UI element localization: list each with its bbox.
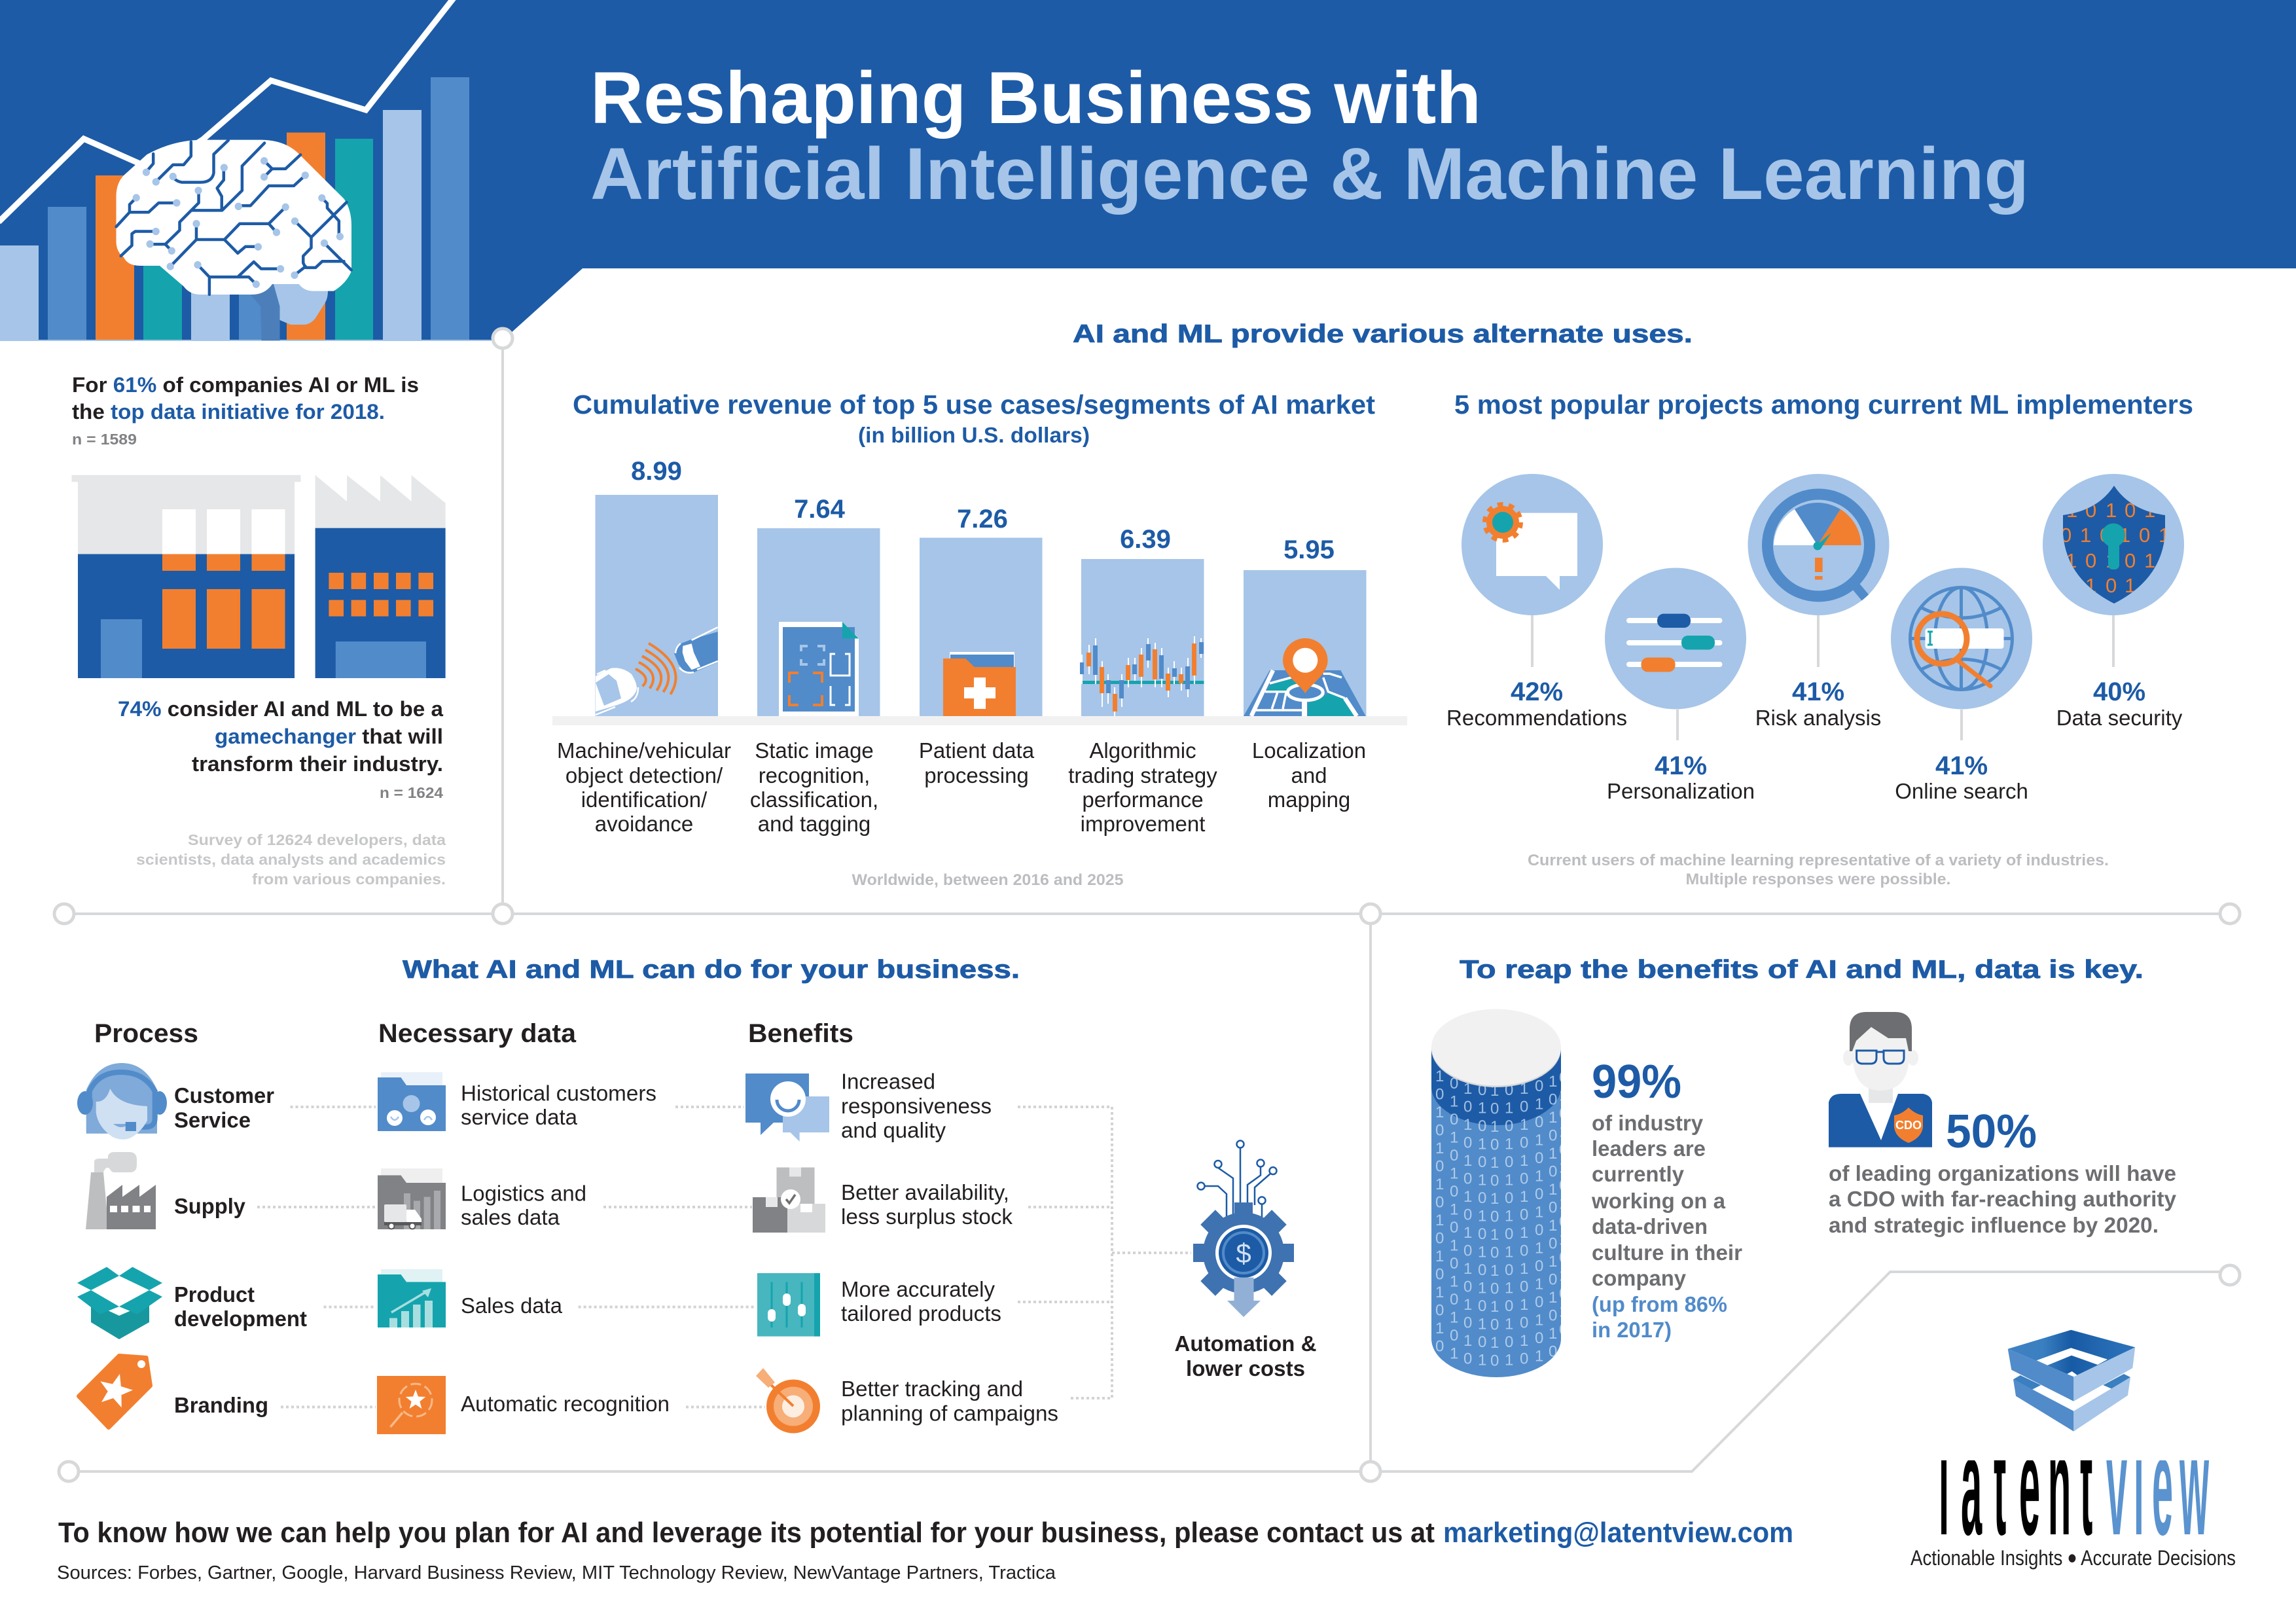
icon: binary data cylinder: 0101010101	[1435, 1157, 1568, 1190]
icon: logistics data folder	[378, 1168, 446, 1229]
text: 74% statistic: gamechanger that will	[215, 725, 443, 748]
panel footnote	[1528, 852, 2109, 888]
logo mark	[2008, 1330, 2135, 1432]
item: risk analysis: Risk analysis	[1755, 706, 1881, 730]
text: responsiveness: responsiveness	[841, 1094, 992, 1118]
text: campaigns	[841, 1377, 1058, 1426]
icon: binary data cylinder: 0101010101	[1435, 1338, 1568, 1369]
icon: customer service	[77, 1063, 167, 1140]
text: 99% statistic: company	[1592, 1266, 1687, 1290]
icon: circuit brain	[117, 140, 351, 340]
text: 99% statistic: working on a	[1591, 1189, 1726, 1213]
icon: binary data cylinder: 0101010101	[1435, 1301, 1568, 1334]
logo: LatentView	[1910, 1330, 2236, 1575]
chart labels: processing	[924, 763, 1029, 787]
icon: binary data cylinder: 1010101010	[1435, 1068, 1568, 1100]
chart labels: recognition,	[759, 763, 870, 787]
chart labels: object detection/	[565, 763, 723, 787]
text: 99% statistic: culture in their	[1592, 1240, 1742, 1265]
chart labels	[557, 738, 1366, 836]
title: Artificial Intelligence & Machine Learning	[590, 133, 2029, 215]
chart labels: trading strategy	[1068, 763, 1217, 787]
chart labels: Algorithmic	[1089, 738, 1196, 763]
icon: product box	[77, 1267, 162, 1339]
text: 50% statistic: of leading organizations will have	[1829, 1161, 2176, 1185]
logo tagline: Actionable Insights	[1910, 1546, 2087, 1570]
item: online search	[1891, 568, 2032, 803]
chart labels: avoidance	[595, 812, 693, 836]
text: logistics data: sales data	[461, 1205, 560, 1229]
text: availability: less surplus stock	[841, 1204, 1013, 1229]
icon: chief data officer: CDO	[1895, 1119, 1922, 1132]
chart labels: Static image	[755, 738, 874, 763]
text: 99% statistic: of industry	[1592, 1111, 1704, 1135]
column headings: Process	[94, 1019, 198, 1048]
panel footnote: Multiple responses were possible.	[1686, 871, 1950, 888]
text: sales data: Sales data	[461, 1293, 563, 1318]
text: automation and lower costs	[1174, 1331, 1317, 1380]
item: data security: 101010	[2066, 499, 2174, 522]
text: 61% statistic: the top data initiative for 2018.	[72, 400, 385, 424]
text: automation and lower costs: Automation &	[1174, 1331, 1317, 1356]
item: personalization	[1605, 568, 1755, 803]
text: availability	[841, 1180, 1013, 1229]
icon: binary data cylinder: 0101010101	[1435, 1194, 1568, 1225]
title	[590, 57, 2029, 215]
icon: vehicles with sensor waves	[596, 627, 718, 715]
text: 99% statistic: 99%	[1592, 1056, 1681, 1108]
icon: sliders tile	[757, 1273, 820, 1337]
text: 74% statistic	[118, 697, 443, 801]
chart bars	[552, 495, 1407, 725]
sources: Sources: Forbes, Gartner, Google, Harvard Business Review, MIT Technology Review, NewVantage Partners, Tractica	[57, 1562, 1056, 1583]
column headings: Benefits	[748, 1019, 853, 1048]
text: tailored products	[841, 1277, 1001, 1326]
item: online search: 41%	[1935, 751, 1988, 780]
header banner background	[0, 0, 2296, 340]
text: product development: Product	[174, 1282, 255, 1307]
text: survey note	[136, 831, 446, 888]
chart values: 6.39	[1120, 525, 1171, 554]
heading: alternate uses: AI and ML provide various alternate uses.	[1073, 320, 1693, 348]
chart labels: Patient data	[919, 738, 1035, 763]
icon: target with arrow	[756, 1368, 820, 1434]
panel: what AI and ML can do	[77, 956, 1317, 1434]
panel: left survey statistics	[72, 373, 446, 888]
icon: binary data cylinder: 1010101010	[1435, 1176, 1568, 1208]
icon: automation gear: $	[1236, 1238, 1251, 1269]
logo tagline: Accurate Decisions	[2077, 1546, 2236, 1570]
icon: binary data cylinder	[1431, 1009, 1568, 1377]
text: campaigns: planning of campaigns	[841, 1401, 1058, 1426]
icon: branding tag	[79, 1356, 151, 1428]
text: availability: Better availability,	[841, 1180, 1009, 1204]
icon: sales data folder	[378, 1269, 446, 1327]
icon: binary data cylinder: 0101010101	[1435, 1229, 1568, 1262]
panel: popular ML projects	[1446, 389, 2193, 888]
text: 61% statistic: For 61% of companies AI or ML is	[72, 373, 419, 397]
item: data security: Data security	[2056, 706, 2183, 730]
text: branding: Branding	[174, 1393, 268, 1417]
chart values: 5.95	[1283, 535, 1335, 564]
panel footnote: Current users of machine learning representative of a variety of industries.	[1528, 852, 2109, 869]
text: historical data: service data	[461, 1105, 578, 1129]
text: product development: development	[174, 1307, 307, 1331]
icon: binary data cylinder: 1010101010	[1435, 1212, 1568, 1244]
text: historical data	[461, 1081, 656, 1129]
dotted connectors	[257, 1107, 1191, 1407]
item: recommendations	[1446, 474, 1627, 730]
logo wordmark: latent	[1939, 1408, 2092, 1564]
item: data security: 40%	[2093, 677, 2145, 706]
chart labels: improvement	[1081, 812, 1205, 836]
text: 99% statistic: in 2017)	[1592, 1318, 1672, 1342]
text: responsiveness	[841, 1070, 992, 1142]
text: survey note: from various companies.	[252, 871, 446, 888]
chart title: (in billion U.S. dollars)	[858, 423, 1090, 447]
text: 50% statistic: 50%	[1946, 1106, 2037, 1158]
chart labels: identification/	[581, 787, 708, 812]
text: 99% statistic: currently	[1592, 1162, 1685, 1186]
chart labels: classification,	[750, 787, 878, 812]
panel: data is key	[1431, 956, 2177, 1377]
icon: factory buildings	[72, 475, 446, 678]
item: recommendations: 42%	[1511, 677, 1563, 706]
connector lines and nodes	[54, 329, 2240, 1481]
panel heading: 5 most popular projects among current ML implementers	[1454, 389, 2193, 420]
icon: chief data officer	[1829, 1012, 1932, 1147]
item: data security: 101010	[2066, 549, 2170, 572]
text: responsiveness: Increased	[841, 1070, 935, 1094]
chart labels: mapping	[1268, 787, 1350, 812]
chart values: 7.26	[957, 505, 1008, 533]
chart labels: and	[1291, 763, 1327, 787]
icon: binary data cylinder: 0101010101	[1435, 1085, 1568, 1118]
heading: To reap the benefits of AI and ML, data is key.	[1460, 956, 2144, 984]
item: personalization: Personalization	[1607, 779, 1755, 803]
footer call to action: To know how we can help you plan for AI and leverage its potential for your business, please contact us at	[58, 1517, 1435, 1549]
icon: automatic recognition	[377, 1376, 446, 1434]
text: 50% statistic: a CDO with far-reaching authority	[1829, 1187, 2177, 1211]
text: 61% statistic: n = 1589	[72, 431, 137, 448]
icon: map with location pin	[1244, 638, 1366, 716]
text: 61% statistic	[72, 373, 419, 448]
chart labels: Machine/vehicular	[557, 738, 731, 763]
chart values: 7.64	[794, 495, 846, 524]
text: historical data: Historical customers	[461, 1081, 656, 1106]
footer call to action: marketing@latentview.com	[1443, 1517, 1793, 1549]
text: 50% statistic	[1829, 1106, 2177, 1237]
logo tagline: •	[2068, 1541, 2077, 1575]
text: campaigns: Better tracking and	[841, 1377, 1023, 1401]
text: 99% statistic: leaders are	[1592, 1136, 1706, 1161]
icon: binary data cylinder: 1010101010	[1435, 1248, 1568, 1280]
icon: binary data cylinder: 1010101010	[1435, 1284, 1568, 1316]
item: data security	[2043, 474, 2184, 730]
text: automatic recognition: Automatic recognition	[461, 1392, 670, 1416]
icon: binary data cylinder: 1010101010	[1435, 1140, 1568, 1172]
icon: image recognition document	[779, 622, 859, 716]
item: risk analysis	[1748, 474, 1889, 730]
icon: supply factory	[86, 1152, 156, 1229]
icon: patient data folder	[943, 652, 1016, 716]
icon: binary data cylinder: 1010101010	[1435, 1320, 1568, 1352]
title: Reshaping Business with	[590, 57, 1481, 139]
chart labels: performance	[1082, 787, 1204, 812]
text: 74% statistic: n = 1624	[380, 784, 443, 801]
logo wordmark: view	[2106, 1408, 2209, 1564]
chart labels: Localization	[1252, 738, 1366, 763]
trend line arrow	[0, 0, 454, 222]
text: supply: Supply	[174, 1194, 246, 1218]
text: 99% statistic: (up from 86%	[1592, 1292, 1727, 1316]
text: logistics data	[461, 1181, 586, 1229]
text: survey note: scientists, data analysts and academics	[136, 851, 446, 868]
text: product development	[174, 1282, 307, 1331]
column headings: Necessary data	[378, 1019, 577, 1048]
text: 74% statistic: transform their industry.	[192, 752, 443, 776]
icon: historical data folder	[378, 1072, 446, 1131]
icon: binary data cylinder: 0101010101	[1435, 1122, 1568, 1153]
text: customer service: Service	[174, 1108, 251, 1132]
text: 99% statistic	[1591, 1056, 1742, 1342]
chart title: Cumulative revenue of top 5 use cases/segments of AI market	[573, 389, 1375, 420]
icon: stock boxes	[753, 1168, 825, 1233]
text: 50% statistic: and strategic influence by 2020.	[1829, 1213, 2159, 1237]
panel: revenue bar chart	[552, 389, 1407, 889]
logo wordmark	[1941, 1460, 2210, 1536]
icon: automation gear	[1193, 1140, 1294, 1317]
text: survey note: Survey of 12624 developers, data	[188, 831, 446, 848]
text: automation and lower costs: lower costs	[1186, 1356, 1305, 1380]
heading: What AI and ML can do for your business.	[403, 956, 1020, 984]
item: data security: 010101	[2060, 524, 2170, 547]
chart values: 8.99	[631, 457, 682, 486]
icon: binary data cylinder: 0101010101	[1435, 1266, 1568, 1297]
text: 74% statistic: 74% consider AI and ML to be a	[118, 697, 443, 721]
item: online search: Online search	[1895, 779, 2028, 803]
text: 99% statistic: data-driven	[1592, 1214, 1708, 1238]
header bar chart illustration	[0, 77, 491, 341]
icon: binary data cylinder: 1010101010	[1435, 1104, 1568, 1136]
text: customer service	[174, 1083, 274, 1132]
text: customer service: Customer	[174, 1083, 274, 1108]
item: recommendations: Recommendations	[1446, 706, 1627, 730]
chart labels: and tagging	[758, 812, 870, 836]
chart values	[631, 457, 1335, 564]
stems	[1532, 615, 2113, 740]
item: data security: 1010	[2085, 574, 2155, 597]
text: responsiveness: and quality	[841, 1118, 946, 1142]
item: risk analysis: 41%	[1792, 677, 1844, 706]
chart footnote: Worldwide, between 2016 and 2025	[852, 871, 1123, 889]
text: tailored products: More accurately	[841, 1277, 995, 1301]
item: personalization: 41%	[1655, 751, 1707, 780]
text: tailored products: tailored products	[841, 1301, 1001, 1326]
column headings	[94, 1019, 853, 1048]
chart title	[573, 389, 1375, 447]
text: logistics data: Logistics and	[461, 1181, 586, 1206]
icon: chat responsiveness	[745, 1074, 829, 1142]
icon: trading candlestick chart	[1080, 636, 1204, 716]
